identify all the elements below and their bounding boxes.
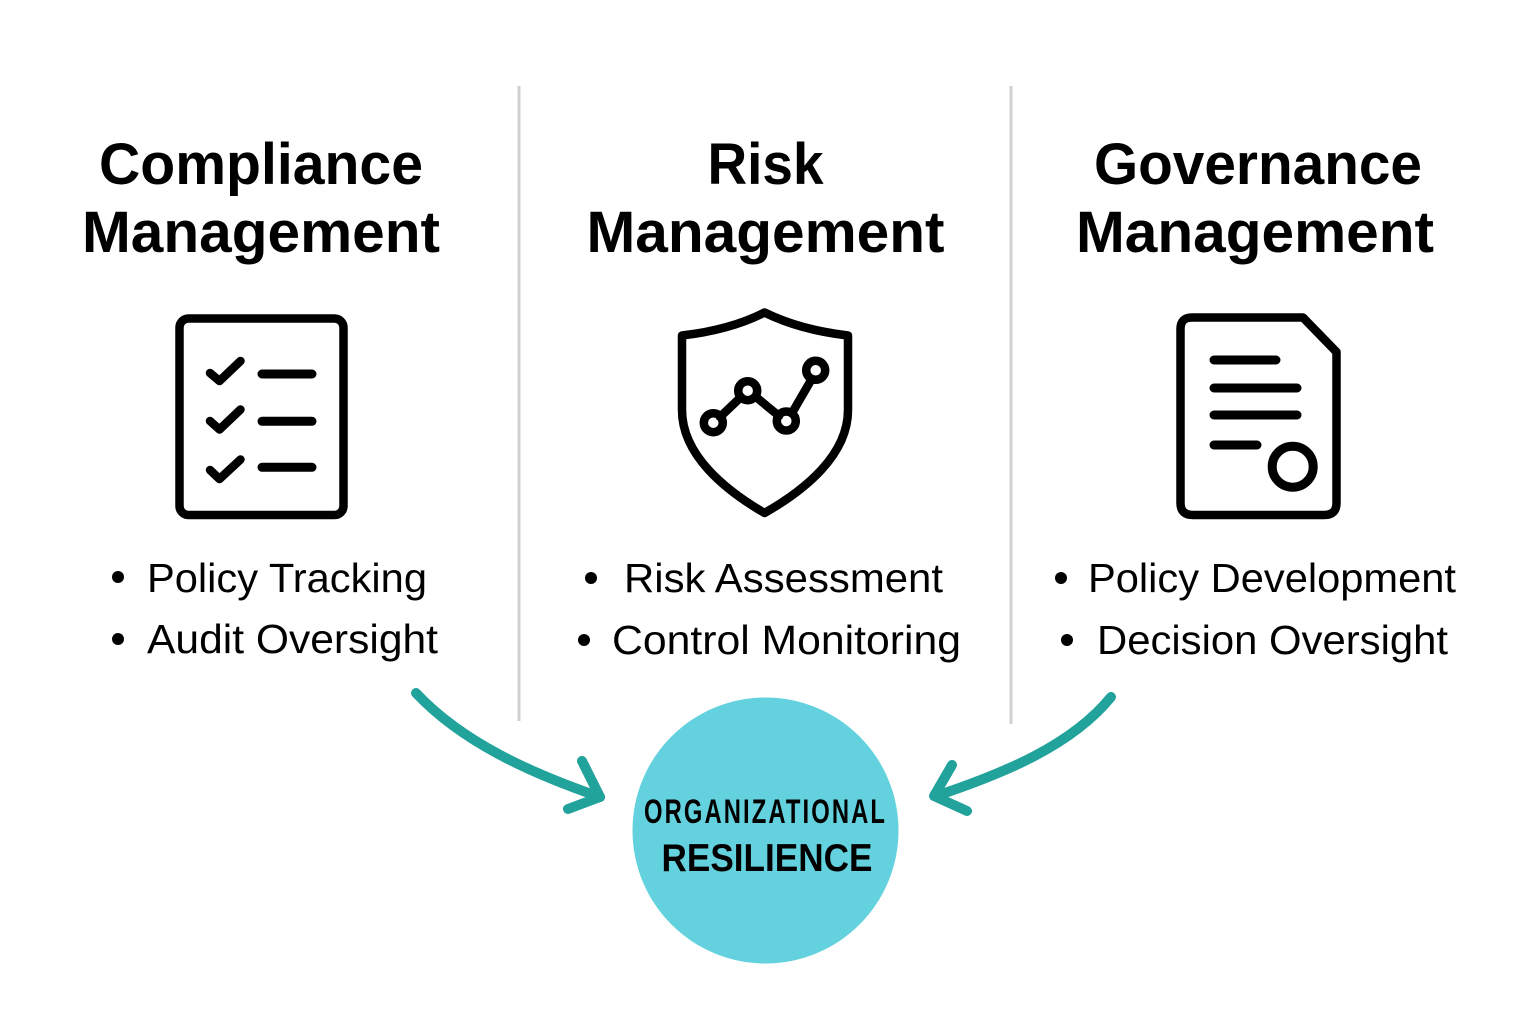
bullet list: governance [1055, 555, 1457, 663]
bullet list: compliance: Policy Tracking [147, 555, 427, 601]
bullet list: governance: Decision Oversight [1097, 617, 1449, 663]
heading: governance management: Governance [1094, 132, 1422, 197]
heading: governance management: Management [1076, 200, 1434, 265]
heading: risk management [586, 132, 944, 265]
heading: compliance management: Compliance [99, 132, 423, 197]
bullet list: risk [578, 555, 961, 663]
arrow: governance to resilience [934, 697, 1111, 811]
icon: checklist [180, 318, 344, 515]
arrow: compliance to resilience [416, 693, 600, 809]
panel: risk management [578, 132, 961, 663]
icon: document with seal [1180, 318, 1336, 515]
bullet list: governance: Policy Development [1088, 555, 1457, 601]
bullet list: compliance: Audit Oversight [147, 616, 439, 662]
panel: governance management [1055, 132, 1457, 663]
circle: organizational resilience: ORGANIZATIONAL [644, 793, 887, 831]
heading: compliance management [82, 132, 440, 265]
panel: compliance management [82, 132, 440, 662]
heading: risk management: Risk [708, 132, 824, 197]
heading: compliance management: Management [82, 200, 440, 265]
bullet list: risk: Control Monitoring [612, 617, 961, 663]
circle: organizational resilience [632, 698, 898, 964]
heading: risk management: Management [586, 200, 944, 265]
bullet list: compliance [112, 555, 439, 662]
heading: governance management [1076, 132, 1434, 265]
bullet list: risk: Risk Assessment [624, 555, 944, 601]
icon: shield with trend line [682, 312, 848, 513]
circle: organizational resilience: RESILIENCE [662, 837, 872, 880]
